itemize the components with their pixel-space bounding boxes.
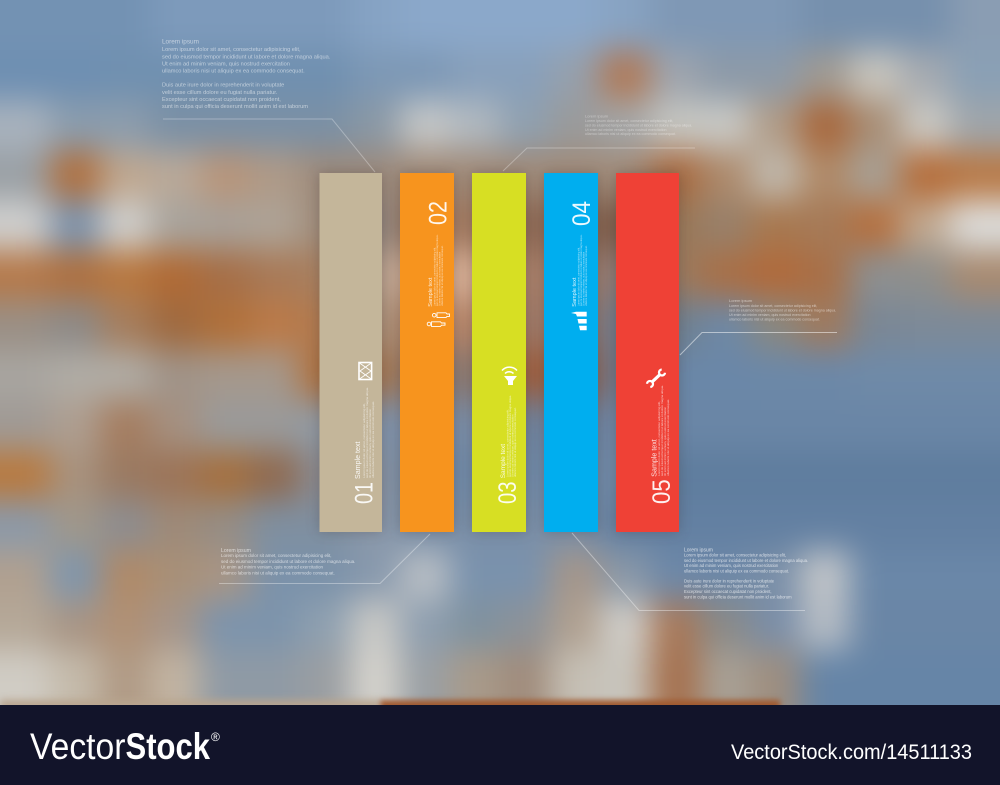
callout: top right text with leader: sed do eiusmod tempor incididunt ut labore et dolore magna aliqua. (585, 123, 692, 127)
number 03: 03 (494, 482, 522, 504)
label: sample text 02: ullamco laboris nisi ut aliquip ex ea commodo consequat. (441, 245, 444, 306)
callout: top left text with leader: Ut enim ad minim veniam, quis nostrud exercitation (162, 62, 290, 68)
label: sample text 05 (650, 385, 670, 477)
label: sample text 02: sed do eiusmod tempor incididunt ut labore et dolore magna aliqua. (436, 234, 439, 306)
callout: bottom right text with leader: Lorem ipsum dolor sit amet, consectetur adipisicing elit, (684, 552, 786, 558)
callout: top right text with leader (503, 113, 695, 171)
label: sample text 05: ullamco laboris nisi ut aliquip ex ea commodo consequat. (666, 399, 670, 476)
callout: top right text with leader: Ut enim ad minim veniam, quis nostrud exercitation (585, 128, 666, 132)
callout: bottom left text with leader: sed do eiusmod tempor incididunt ut labore et dolore magna aliqua. (221, 559, 355, 564)
number 01: 01 (351, 482, 379, 504)
icon: envelope (359, 362, 372, 380)
label: sample text 04 (572, 234, 588, 307)
logo: VectorStock: Stock (126, 726, 210, 767)
label: sample text 05: sed do eiusmod tempor incididunt ut labore et dolore magna aliqua. (660, 385, 664, 476)
label: sample text 01: Lorem ipsum dolor sit amet, consectetur adipisicing elit, (362, 403, 366, 478)
callout: bottom left text with leader: Lorem ipsum (221, 548, 251, 554)
callout: bottom left text with leader: ullamco laboris nisi ut aliquip ex ea commodo consequat. (221, 570, 335, 576)
label: sample text 01: sed do eiusmod tempor incididunt ut labore et dolore magna aliqua. (365, 387, 369, 478)
callout: bottom left text with leader: Ut enim ad minim veniam, quis nostrud exercitation (221, 565, 324, 570)
callout: top left text with leader: sunt in culpa qui officia deserunt mollit anim id est laborum (162, 104, 308, 110)
callout: right text with leader: Ut enim ad minim veniam, quis nostrud exercitation (729, 313, 810, 317)
label: sample text 01 (354, 387, 375, 479)
callout: top left text with leader: Excepteur sint occaecat cupidatat non proident, (162, 97, 281, 103)
callout: top left text with leader: ullamco laboris nisi ut aliquip ex ea commodo consequat. (162, 69, 305, 75)
label: sample text 02: Lorem ipsum dolor sit amet, consectetur adipisicing elit, (434, 247, 436, 306)
label: sample text 03 (500, 395, 517, 478)
bar 05: red (616, 173, 679, 532)
label: sample text 04: Lorem ipsum dolor sit amet, consectetur adipisicing elit, (578, 247, 580, 306)
label: sample text 04: Ut enim ad minim veniam, quis nostrud exercitation (582, 251, 586, 306)
label: sample text 02: Ut enim ad minim veniam, quis nostrud exercitation (438, 251, 442, 306)
callout: top right text with leader: Lorem ipsum (585, 113, 609, 118)
label: sample text 02 (428, 234, 444, 307)
callout: top left text with leader: velit esse cillum dolore eu fugiat nulla pariatur. (162, 90, 278, 96)
logo: VectorStock: Vector (30, 726, 126, 767)
callout: right text with leader (680, 298, 837, 355)
callout: bottom right text with leader: Excepteur sint occaecat cupidatat non proident, (684, 589, 772, 594)
label: sample text 01: Ut enim ad minim veniam, quis nostrud exercitation (368, 409, 372, 478)
label: sample text 05: Ut enim ad minim veniam, quis nostrud exercitation (663, 407, 667, 476)
label: sample text 04: ullamco laboris nisi ut aliquip ex ea commodo consequat. (585, 245, 588, 306)
logo: VectorStock: ® (211, 730, 220, 744)
callout: right text with leader: Lorem ipsum dolor sit amet, consectetur adipisicing elit, (729, 304, 817, 308)
callout: bottom left text with leader: Lorem ipsum dolor sit amet, consectetur adipisicing elit, (221, 553, 332, 558)
callout: bottom left text with leader (219, 534, 430, 584)
label: sample text 01: ullamco laboris nisi ut aliquip ex ea commodo consequat. (371, 401, 375, 478)
callout: right text with leader: sed do eiusmod tempor incididunt ut labore et dolore magna aliqua. (729, 308, 836, 312)
callout: bottom right text with leader (572, 533, 808, 610)
callout: top left text with leader: Lorem ipsum dolor sit amet, consectetur adipisicing elit, (162, 47, 301, 53)
callout: bottom right text with leader: velit esse cillum dolore eu fugiat nulla pariatur. (684, 584, 769, 589)
bar 02: orange (400, 173, 454, 532)
callout: bottom right text with leader: sunt in culpa qui officia deserunt mollit anim id est laborum (684, 594, 792, 599)
bar 03: yellow-green (472, 173, 526, 532)
callout: top left text with leader: Lorem ipsum (162, 39, 199, 46)
callout: right text with leader: ullamco laboris nisi ut aliquip ex ea commodo consequat. (729, 318, 820, 322)
callout: bottom right text with leader: sed do eiusmod tempor incididunt ut labore et dolore magna aliqua. (684, 558, 808, 563)
callout: bottom right text with leader: Duis aute irure dolor in reprehenderit in voluptate (684, 578, 775, 583)
icon: wrench (647, 370, 665, 387)
number 05: 05 (648, 479, 676, 504)
label: sample text 03: Sample text (500, 444, 507, 478)
label: sample text 04: Sample text (572, 277, 578, 307)
callout: bottom right text with leader: Ut enim ad minim veniam, quis nostrud exercitation (684, 563, 779, 568)
icon: plugs (427, 313, 450, 326)
label: sample text 03: Lorem ipsum dolor sit amet, consectetur adipisicing elit, (506, 409, 510, 477)
label: sample text 03: Ut enim ad minim veniam, quis nostrud exercitation (510, 414, 514, 477)
icon: bar chart (571, 312, 587, 330)
bar 01: tan (320, 173, 382, 532)
footer id text: VectorStock.com/14511133 (731, 741, 972, 764)
callout: right text with leader: Lorem ipsum (729, 298, 753, 303)
label: sample text 04: sed do eiusmod tempor incididunt ut labore et dolore magna aliqua. (580, 234, 583, 306)
number 04: 04 (568, 201, 596, 226)
callout: bottom right text with leader: ullamco laboris nisi ut aliquip ex ea commodo consequat. (684, 568, 789, 573)
number 02: 02 (425, 201, 453, 225)
label: sample text 05: Lorem ipsum dolor sit amet, consectetur adipisicing elit, (657, 401, 661, 476)
label: sample text 03: sed do eiusmod tempor incididunt ut labore et dolore magna aliqua. (508, 395, 512, 477)
callout: top right text with leader: ullamco laboris nisi ut aliquip ex ea commodo consequat. (585, 132, 676, 136)
bar shadows (319, 173, 679, 532)
label: sample text 02: Sample text (428, 277, 434, 307)
callout: top left text with leader (162, 39, 375, 172)
bar 04: blue (544, 173, 598, 532)
callout: bottom right text with leader: Lorem ipsum (684, 548, 713, 554)
callout: top right text with leader: Lorem ipsum dolor sit amet, consectetur adipisicing elit, (585, 119, 673, 123)
label: sample text 03: ullamco laboris nisi ut aliquip ex ea commodo consequat. (513, 407, 517, 477)
label: sample text 05: Sample text (650, 439, 658, 477)
label: sample text 01: Sample text (354, 442, 362, 479)
icon: speaker (502, 367, 517, 385)
footer band (0, 705, 1000, 785)
logo: VectorStock (30, 726, 220, 767)
callout: top left text with leader: sed do eiusmod tempor incididunt ut labore et dolore magna aliqua. (162, 54, 331, 60)
callout: top left text with leader: Duis aute irure dolor in reprehenderit in voluptate (162, 83, 284, 89)
